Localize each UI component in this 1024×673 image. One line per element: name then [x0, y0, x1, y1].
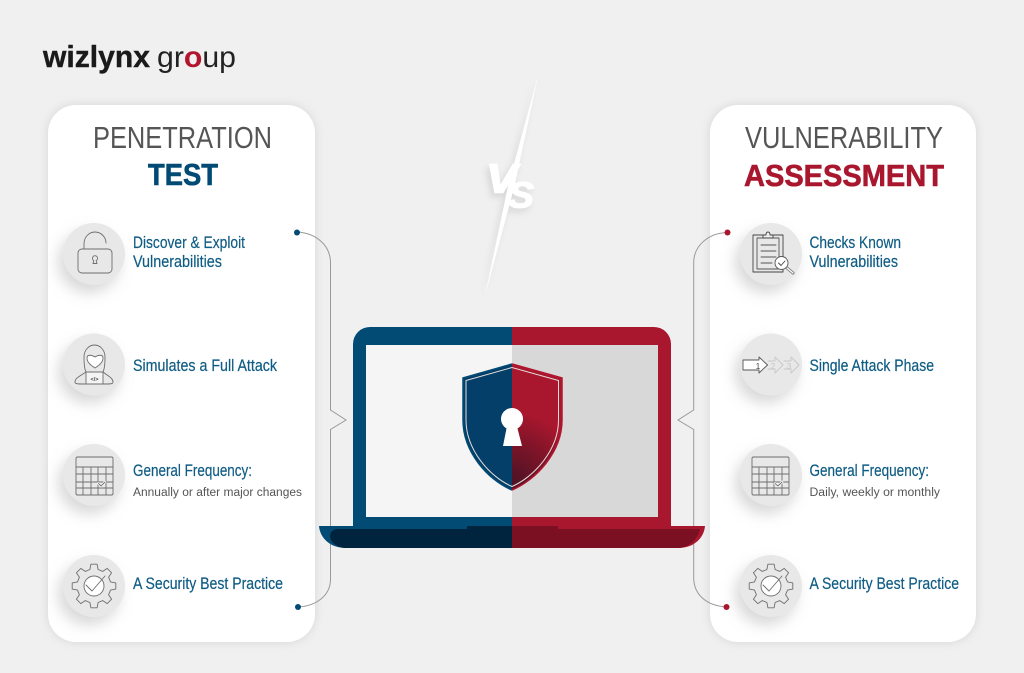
- heading: assessment: ASSESSMENT: [744, 158, 944, 193]
- icon: gear check: [72, 564, 116, 608]
- panel: vulnerability assessment: [710, 105, 976, 642]
- icon: calendar: [752, 457, 789, 495]
- shield: [463, 364, 562, 490]
- panel: penetration test: [48, 105, 315, 642]
- laptop illustration: [319, 327, 705, 548]
- laptop lid: [353, 327, 512, 527]
- logo: wizlynx group: [42, 39, 236, 74]
- icon: hacker: [75, 345, 113, 384]
- label: Single Attack Phase: [810, 357, 934, 375]
- item: security best practice: [63, 555, 283, 617]
- label: General Frequency:: [810, 462, 929, 480]
- label: Simulates a Full Attack: [133, 357, 278, 375]
- label: General Frequency:: [133, 462, 252, 480]
- item: checks known vulnerabilities: [740, 223, 901, 285]
- icon: phase arrows: 1: [756, 362, 761, 371]
- left bracket: [294, 230, 346, 610]
- sublabel: Daily, weekly or monthly: [810, 487, 940, 499]
- item: checks known vulnerabilities: Vulnerabilities: [810, 253, 898, 271]
- label: Checks Known: [810, 234, 901, 252]
- right bracket: [678, 230, 730, 610]
- item: discover and exploit: Vulnerabilities: [133, 253, 222, 271]
- vs emblem: S: [508, 174, 534, 216]
- screen: [366, 345, 512, 517]
- label: Discover & Exploit: [133, 234, 245, 252]
- label: A Security Best Practice: [133, 575, 283, 593]
- icon: open padlock: [78, 232, 112, 273]
- item: simulates a full attack: [63, 334, 278, 396]
- logo: wizlynx group: group: [157, 41, 236, 74]
- item: general frequency: [63, 444, 302, 506]
- icon: gear check: [749, 564, 793, 608]
- icon: phase arrows: 2: [771, 362, 776, 371]
- item: discover and exploit: [63, 223, 245, 285]
- icon: hacker: </>: [91, 377, 98, 383]
- sublabel: Annually or after major changes: [133, 487, 302, 499]
- item: security best practice: [740, 555, 959, 617]
- heading: vulnerability: VULNERABILITY: [745, 120, 943, 155]
- icon: phase arrows: [743, 357, 799, 373]
- item: single attack phase: [740, 334, 934, 396]
- item: general frequency: [740, 444, 940, 506]
- heading: penetration: PENETRATION: [93, 120, 272, 155]
- icon: clipboard with magnifier: [753, 232, 793, 273]
- laptop base: [319, 526, 512, 548]
- icon: calendar: [76, 457, 113, 495]
- logo: wizlynx group: wizlynx: [42, 39, 151, 74]
- label: A Security Best Practice: [810, 575, 959, 593]
- heading: test: TEST: [148, 157, 218, 192]
- slash: [485, 76, 538, 296]
- vs text: V: [486, 156, 521, 202]
- icon: phase arrows: 3: [787, 362, 792, 371]
- keyhole: [501, 408, 523, 446]
- vs emblem: [485, 76, 538, 296]
